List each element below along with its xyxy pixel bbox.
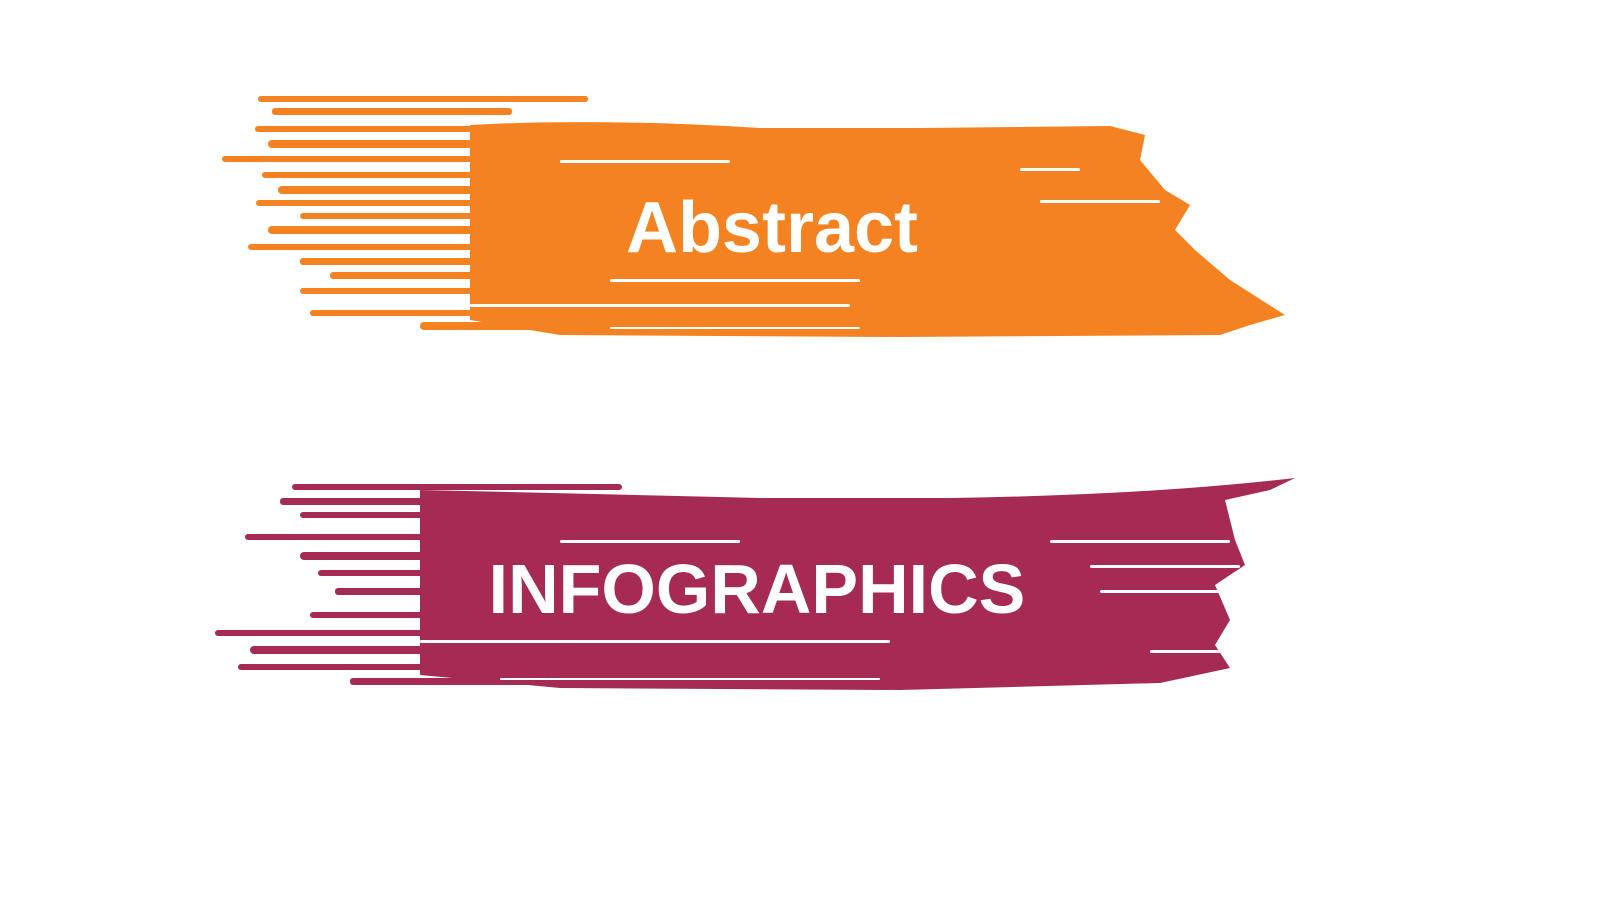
heading: INFOGRAPHICS: INFOGRAPHICS [489,550,1025,628]
panel: magenta brush stroke [215,478,1295,690]
heading: Abstract: Abstract [626,188,918,268]
panel: orange brush stroke [222,96,1285,337]
